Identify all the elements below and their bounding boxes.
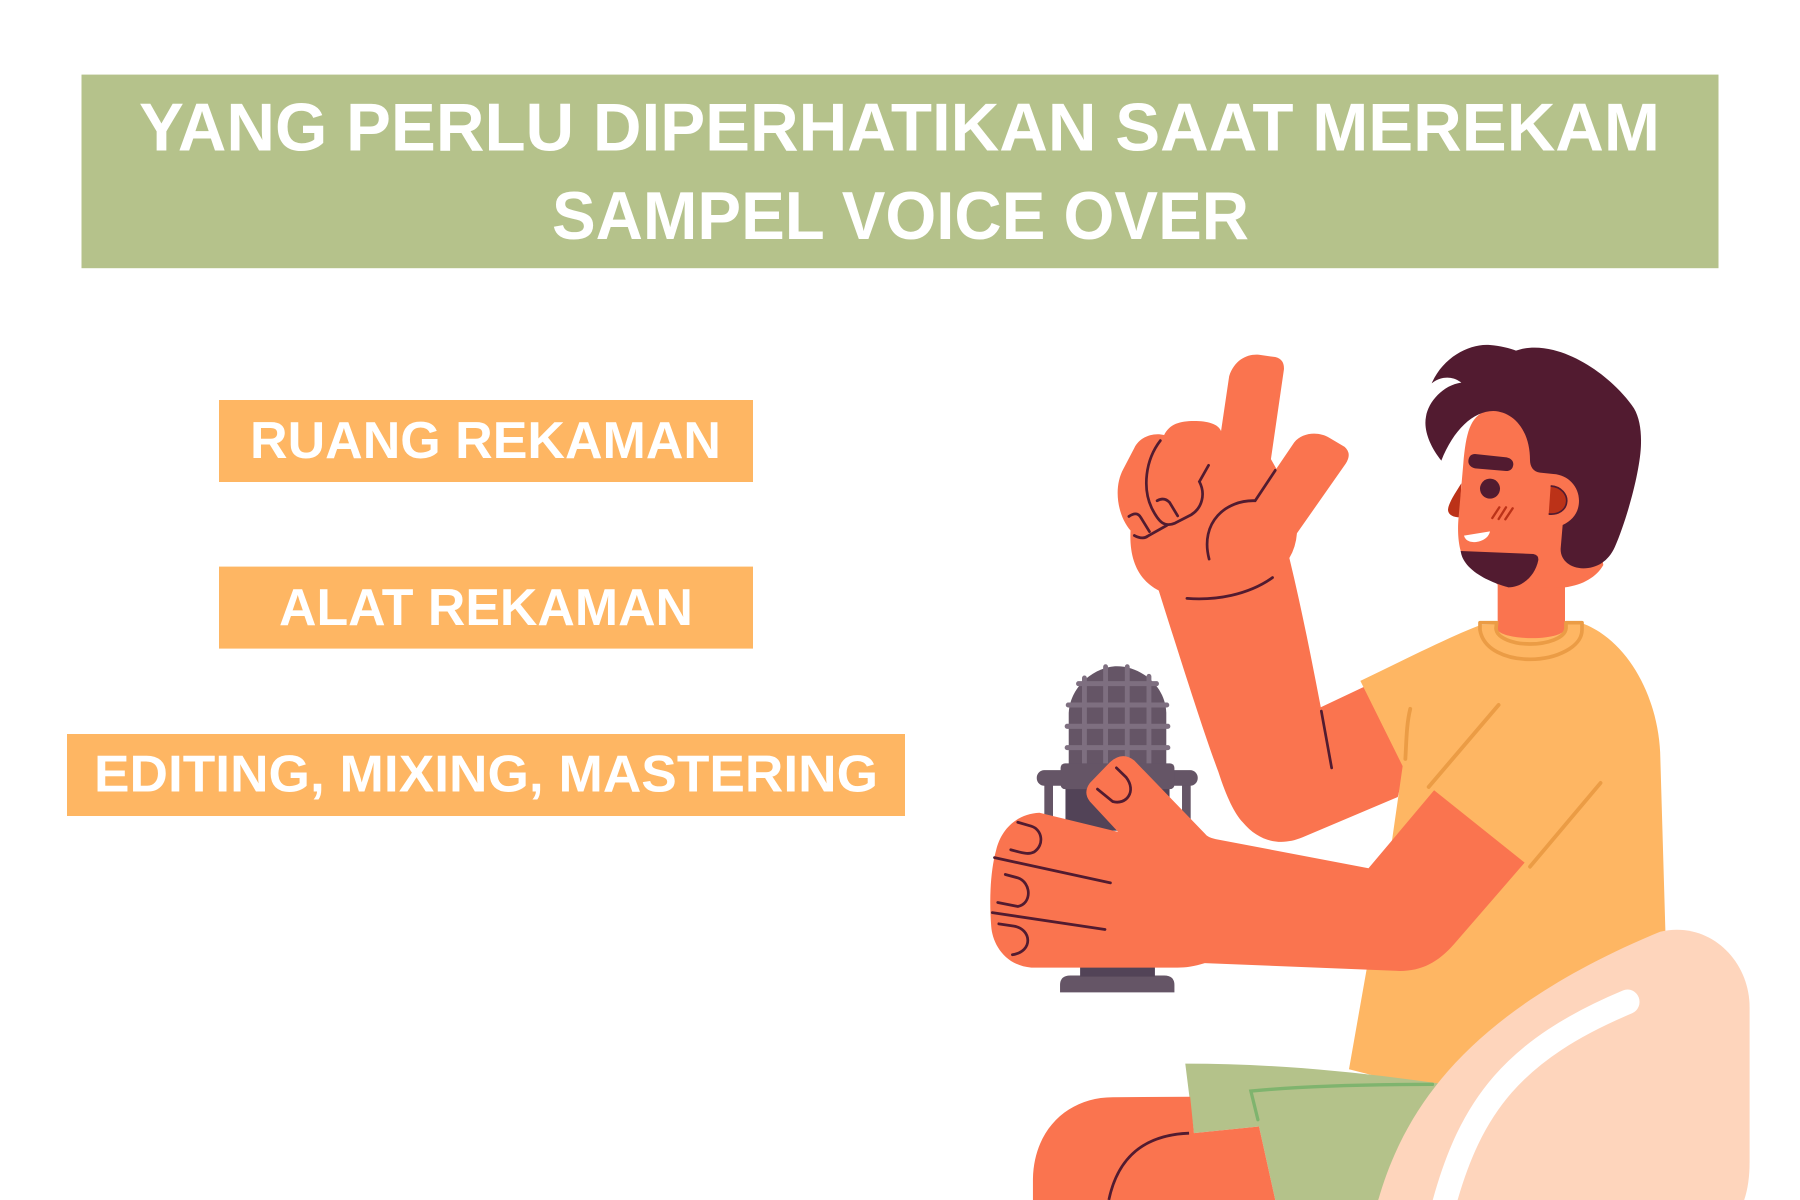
icon: studio microphone — [1037, 666, 1198, 992]
front arm and hand holding microphone — [990, 756, 1525, 971]
title banner — [82, 75, 1718, 268]
hair — [1425, 345, 1641, 568]
title text: YANG PERLU DIPERHATIKAN SAAT MEREKAM — [139, 90, 1660, 166]
label: ruang rekaman: RUANG REKAMAN — [250, 412, 721, 470]
label: alat rekaman: ALAT REKAMAN — [279, 579, 693, 637]
eye — [1480, 479, 1500, 499]
head with hair, face and collar — [1425, 345, 1641, 659]
label: editing, mixing, mastering: EDITING, MIXING, MASTERING — [94, 746, 878, 804]
nose — [1448, 483, 1461, 517]
green shorts — [1185, 1064, 1438, 1200]
beard — [1461, 551, 1538, 587]
title text — [139, 90, 1660, 254]
leg — [1033, 1097, 1275, 1200]
armchair — [1378, 930, 1750, 1200]
label: ruang rekaman — [219, 400, 753, 482]
label: editing, mixing, mastering — [67, 734, 905, 816]
label: alat rekaman — [219, 567, 753, 649]
title text: SAMPEL VOICE OVER — [552, 178, 1249, 254]
raised arm and hand — [1118, 355, 1405, 842]
smile — [1464, 531, 1490, 542]
ear — [1549, 486, 1567, 514]
illustration: man speaking into microphone — [990, 345, 1750, 1200]
eyebrow — [1468, 454, 1513, 471]
face — [1458, 411, 1603, 587]
cheek marks — [1492, 507, 1513, 519]
yellow t-shirt — [1349, 623, 1666, 1106]
